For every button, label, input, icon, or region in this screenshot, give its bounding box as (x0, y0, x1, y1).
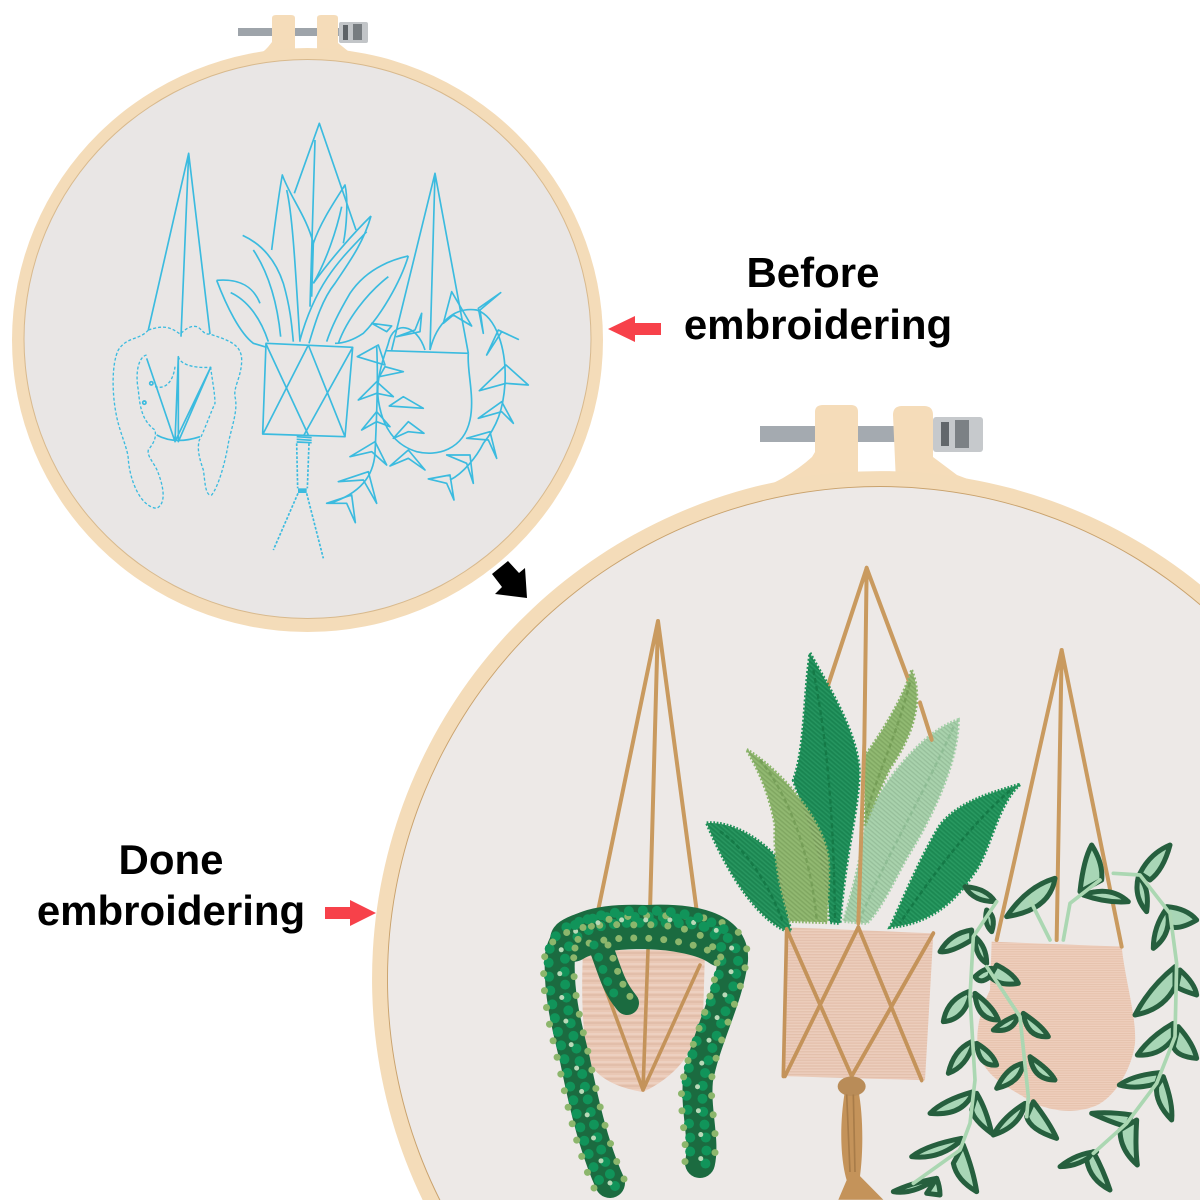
label: before embroidering: embroidering (684, 301, 952, 348)
panel: hoop after embroidering (372, 405, 1200, 1200)
label: done embroidering: embroidering (37, 887, 305, 934)
icon: large hoop screw (760, 405, 983, 482)
center plant (707, 568, 1020, 1200)
arrow: red arrow to done hoop (325, 900, 376, 926)
left pot (582, 950, 705, 1092)
left hangers (598, 621, 697, 913)
arrow: black arrow between hoops (492, 561, 527, 598)
hoop ring (12, 48, 603, 632)
knot and tassel (838, 1077, 883, 1200)
left plant (544, 621, 747, 1188)
hoop ring (372, 471, 1200, 1200)
center pot (783, 927, 933, 1080)
center plant outline (217, 123, 408, 558)
fabric (388, 487, 1200, 1200)
left hanging pot outline (113, 153, 242, 508)
right plant vines (893, 845, 1197, 1195)
arrow: red arrow to before hoop (608, 316, 661, 342)
right pot and hangers (977, 650, 1135, 1111)
leaves (707, 653, 1020, 932)
left pot macrame (593, 950, 700, 1090)
label: before embroidering (684, 249, 952, 348)
vine leaves (893, 845, 1197, 1195)
icon: top hoop screw (238, 15, 378, 76)
label: done embroidering: Done (118, 836, 224, 883)
blue pattern drawing (113, 123, 528, 558)
beaded vine (544, 911, 747, 1188)
label: done embroidering (37, 836, 305, 934)
right hanger lower stub (920, 703, 932, 740)
right plant outline (327, 173, 528, 523)
fabric (24, 60, 590, 618)
panel: hoop before embroidering (12, 15, 603, 632)
macrame lines (783, 927, 933, 1080)
vine stems (913, 873, 1177, 1183)
label: before embroidering: Before (746, 249, 880, 296)
center hanger strand (858, 568, 867, 923)
center hanger (828, 568, 912, 689)
